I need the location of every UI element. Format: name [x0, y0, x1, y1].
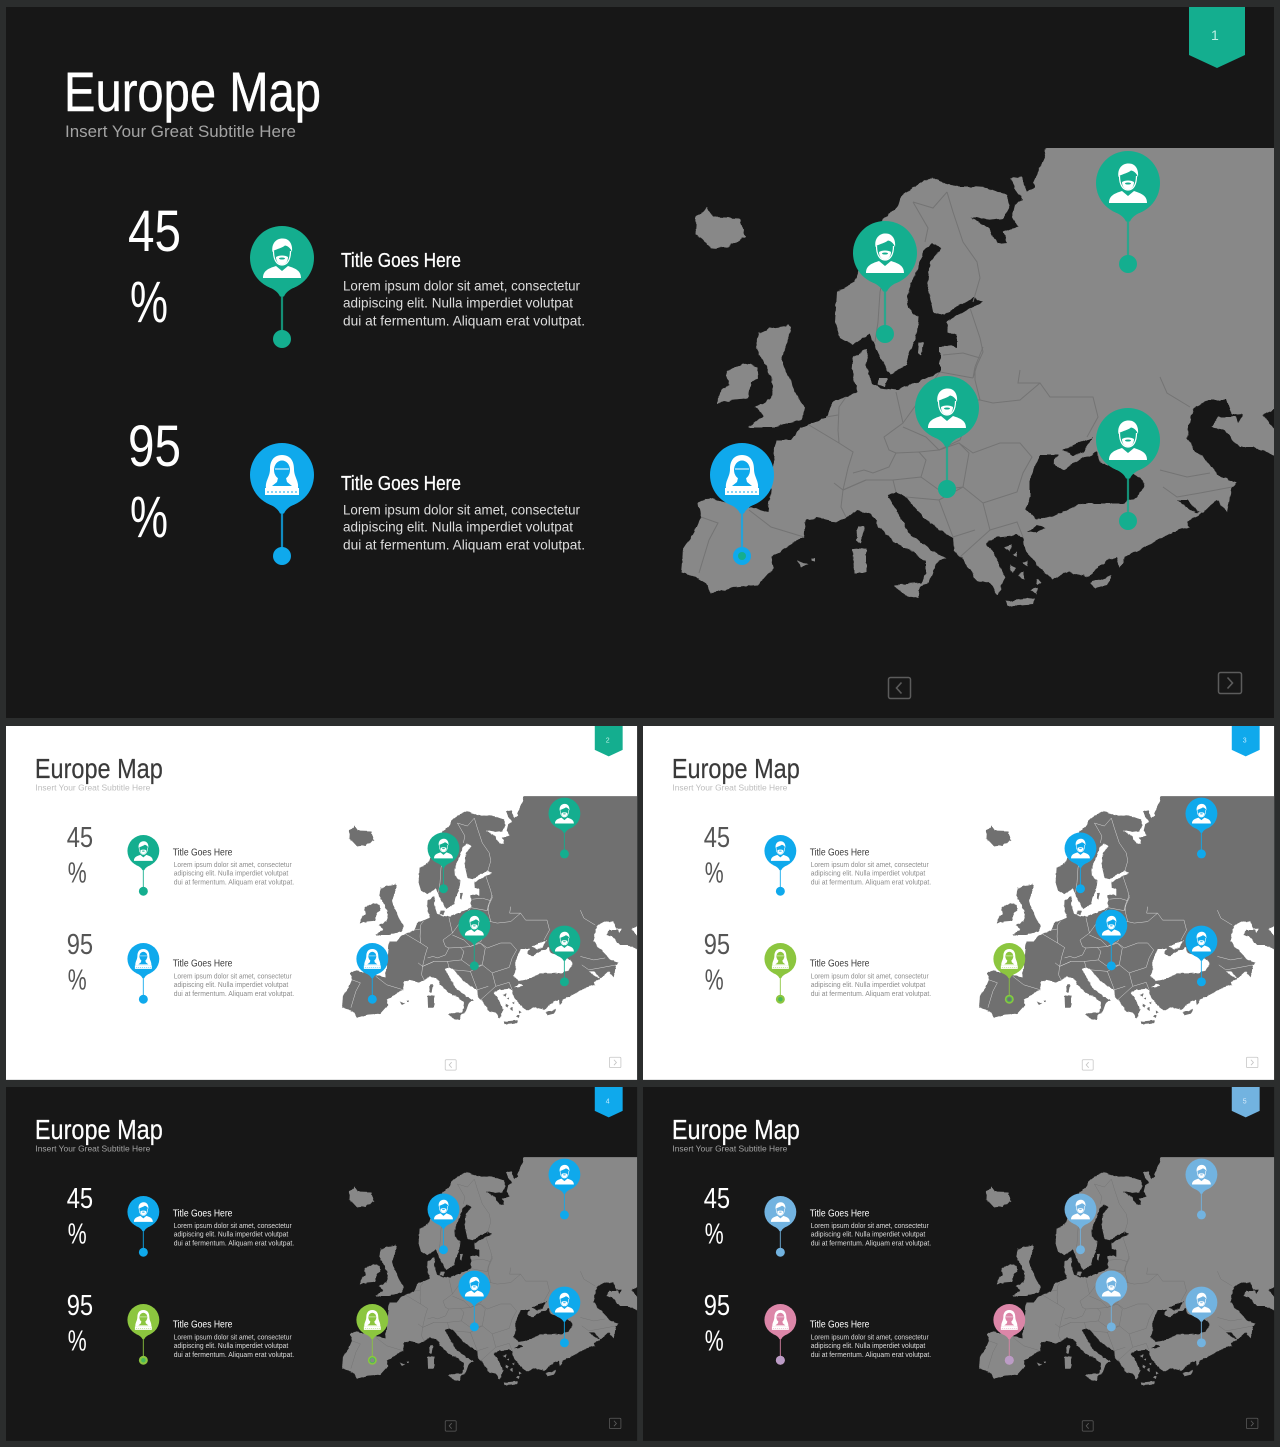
text block 2: Lorem ipsum dolor sit amet, consectetur: [343, 502, 580, 518]
text block 1: adipiscing elit. Nulla imperdiet volutpat: [174, 870, 288, 877]
text block 1: Title Goes Here: [173, 1208, 233, 1219]
text block 1: Lorem ipsum dolor sit amet, consectetur: [343, 278, 580, 294]
text block 2: [810, 958, 931, 998]
text block 1: Title Goes Here: [810, 1208, 870, 1219]
text block 1: [173, 1208, 294, 1247]
text block 2: Title Goes Here: [173, 1319, 233, 1330]
next button: [1246, 1057, 1258, 1068]
previous button: [1082, 1060, 1093, 1070]
stat: 45 percent: %: [705, 857, 724, 889]
slide 3: white blue and lime: [643, 726, 1280, 1080]
text block 2: [173, 1319, 294, 1359]
text block 2: adipiscing elit. Nulla imperdiet volutpat: [811, 1343, 925, 1350]
text block 1: dui at fermentum. Aliquam erat volutpat.: [811, 1240, 931, 1247]
next button: [1246, 1418, 1258, 1429]
stat: 45 percent: %: [130, 270, 168, 335]
page ribbon: 5: [1243, 1098, 1247, 1105]
stat: 95 percent: [67, 1290, 93, 1357]
text block 1: adipiscing elit. Nulla imperdiet volutpat: [811, 1231, 925, 1238]
stat: 45 percent: 45: [67, 822, 93, 854]
text block 2: Lorem ipsum dolor sit amet, consectetur: [174, 973, 292, 980]
text block 2: Title Goes Here: [173, 958, 233, 969]
stat: 95 percent: [704, 1290, 730, 1357]
text block 1: Lorem ipsum dolor sit amet, consectetur: [811, 1223, 929, 1230]
text block 2: Lorem ipsum dolor sit amet, consectetur: [174, 1334, 292, 1341]
previous button: [445, 1421, 456, 1431]
text block 1: Lorem ipsum dolor sit amet, consectetur: [174, 862, 292, 869]
subtitle: Insert Your Great Subtitle Here: [65, 122, 296, 141]
text block 2: [810, 1319, 931, 1359]
text block 2: Lorem ipsum dolor sit amet, consectetur: [811, 973, 929, 980]
stat: 95 percent: [67, 929, 93, 996]
previous button: [888, 678, 910, 698]
text block 2: Title Goes Here: [810, 958, 870, 969]
next button: [1218, 672, 1242, 694]
text block 1: Lorem ipsum dolor sit amet, consectetur: [174, 1223, 292, 1230]
stat: 95 percent: 95: [704, 929, 730, 961]
stat: 45 percent: [128, 199, 181, 335]
text block 1: Title Goes Here: [341, 250, 461, 272]
stat: 95 percent: %: [705, 1325, 724, 1357]
pin icon: female blue: [127, 943, 159, 1004]
map pins: [993, 1159, 1217, 1365]
text block 2: adipiscing elit. Nulla imperdiet volutpat: [174, 982, 288, 989]
stat: 95 percent: 95: [128, 414, 181, 479]
pin icon: male teal: [127, 835, 159, 896]
map pins: [356, 1159, 580, 1365]
next button: [609, 1418, 621, 1429]
stat: 95 percent: 95: [67, 929, 93, 961]
text block 2: Title Goes Here: [810, 1319, 870, 1330]
text block 1: [810, 847, 931, 886]
stat: 45 percent: [704, 822, 730, 889]
text block 1: dui at fermentum. Aliquam erat volutpat.: [811, 879, 931, 886]
subtitle: Insert Your Great Subtitle Here: [35, 783, 151, 793]
stat: 95 percent: 95: [704, 1290, 730, 1322]
stat: 45 percent: [67, 822, 93, 889]
pin icon: female lime: [127, 1304, 159, 1365]
stat: 95 percent: %: [130, 485, 168, 550]
map pins: [710, 151, 1160, 565]
stat: 45 percent: 45: [67, 1183, 93, 1215]
stat: 45 percent: [67, 1183, 93, 1250]
map of Europe: [342, 792, 643, 1024]
stat: 95 percent: %: [68, 1325, 87, 1357]
text block 2: [341, 473, 585, 552]
next button: [609, 1057, 621, 1068]
page ribbon: 2: [606, 737, 610, 744]
stat: 45 percent: %: [705, 1218, 724, 1250]
stat: 45 percent: 45: [704, 1183, 730, 1215]
text block 1: dui at fermentum. Aliquam erat volutpat.: [174, 879, 294, 886]
page ribbon: 1: [1211, 27, 1219, 43]
slide 1: large dark slide: [6, 7, 1280, 718]
text block 1: adipiscing elit. Nulla imperdiet volutpat: [174, 1231, 288, 1238]
title: Europe Map: [672, 1114, 800, 1145]
previous button: [445, 1060, 456, 1070]
page ribbon: [1189, 7, 1245, 68]
text block 1: adipiscing elit. Nulla imperdiet volutpat: [811, 870, 925, 877]
page ribbon: [595, 726, 623, 756]
map of Europe: [342, 1153, 643, 1385]
pin icon: female pink: [764, 1304, 796, 1365]
map pins: [993, 798, 1217, 1004]
text block 2: Title Goes Here: [341, 473, 461, 495]
pin icon: female blue: [250, 443, 314, 565]
page ribbon: [1232, 1087, 1260, 1117]
subtitle: Insert Your Great Subtitle Here: [35, 1144, 151, 1154]
text block 2: dui at fermentum. Aliquam erat volutpat.: [174, 991, 294, 998]
page ribbon: [595, 1087, 623, 1117]
text block 1: dui at fermentum. Aliquam erat volutpat.: [343, 312, 585, 328]
slide 5: dark light-blue and pink: [643, 1087, 1280, 1441]
title: Europe Map: [35, 753, 163, 784]
text block 2: dui at fermentum. Aliquam erat volutpat.: [811, 991, 931, 998]
page ribbon: 4: [606, 1098, 610, 1105]
stat: 45 percent: 45: [128, 199, 181, 264]
text block 1: [810, 1208, 931, 1247]
text block 1: Title Goes Here: [810, 847, 870, 858]
text block 1: dui at fermentum. Aliquam erat volutpat.: [174, 1240, 294, 1247]
previous button: [1082, 1421, 1093, 1431]
text block 2: dui at fermentum. Aliquam erat volutpat.: [343, 536, 585, 552]
subtitle: Insert Your Great Subtitle Here: [672, 783, 788, 793]
pin icon: female lime: [764, 943, 796, 1004]
slide 4: dark blue and lime: [6, 1087, 643, 1441]
stat: 45 percent: [704, 1183, 730, 1250]
page ribbon: 3: [1243, 737, 1247, 744]
text block 2: adipiscing elit. Nulla imperdiet volutpat: [174, 1343, 288, 1350]
stat: 95 percent: %: [705, 964, 724, 996]
text block 1: Title Goes Here: [173, 847, 233, 858]
map of Europe: [979, 1153, 1280, 1385]
slide 2: white teal: [6, 726, 643, 1080]
text block 1: [173, 847, 294, 886]
title: Europe Map: [64, 60, 321, 123]
subtitle: Insert Your Great Subtitle Here: [672, 1144, 788, 1154]
stat: 45 percent: %: [68, 857, 87, 889]
text block 2: dui at fermentum. Aliquam erat volutpat.: [811, 1352, 931, 1359]
text block 1: adipiscing elit. Nulla imperdiet volutpat: [343, 294, 573, 310]
text block 2: [173, 958, 294, 998]
title: Europe Map: [35, 1114, 163, 1145]
stat: 45 percent: %: [68, 1218, 87, 1250]
title: Europe Map: [672, 753, 800, 784]
pin icon: male teal: [250, 226, 314, 348]
text block 2: adipiscing elit. Nulla imperdiet volutpat: [811, 982, 925, 989]
text block 2: dui at fermentum. Aliquam erat volutpat.: [174, 1352, 294, 1359]
pin icon: male blue: [127, 1196, 159, 1257]
map of Europe: [681, 140, 1280, 606]
stat: 95 percent: [128, 414, 181, 550]
stat: 45 percent: 45: [704, 822, 730, 854]
text block 1: Lorem ipsum dolor sit amet, consectetur: [811, 862, 929, 869]
map of Europe: [979, 792, 1280, 1024]
text block 2: Lorem ipsum dolor sit amet, consectetur: [811, 1334, 929, 1341]
stat: 95 percent: %: [68, 964, 87, 996]
map pins: [356, 798, 580, 1004]
page ribbon: [1232, 726, 1260, 756]
pin icon: male blue: [764, 835, 796, 896]
pin icon: male light blue: [764, 1196, 796, 1257]
stat: 95 percent: 95: [67, 1290, 93, 1322]
text block 2: adipiscing elit. Nulla imperdiet volutpat: [343, 518, 573, 534]
stat: 95 percent: [704, 929, 730, 996]
text block 1: [341, 250, 585, 328]
